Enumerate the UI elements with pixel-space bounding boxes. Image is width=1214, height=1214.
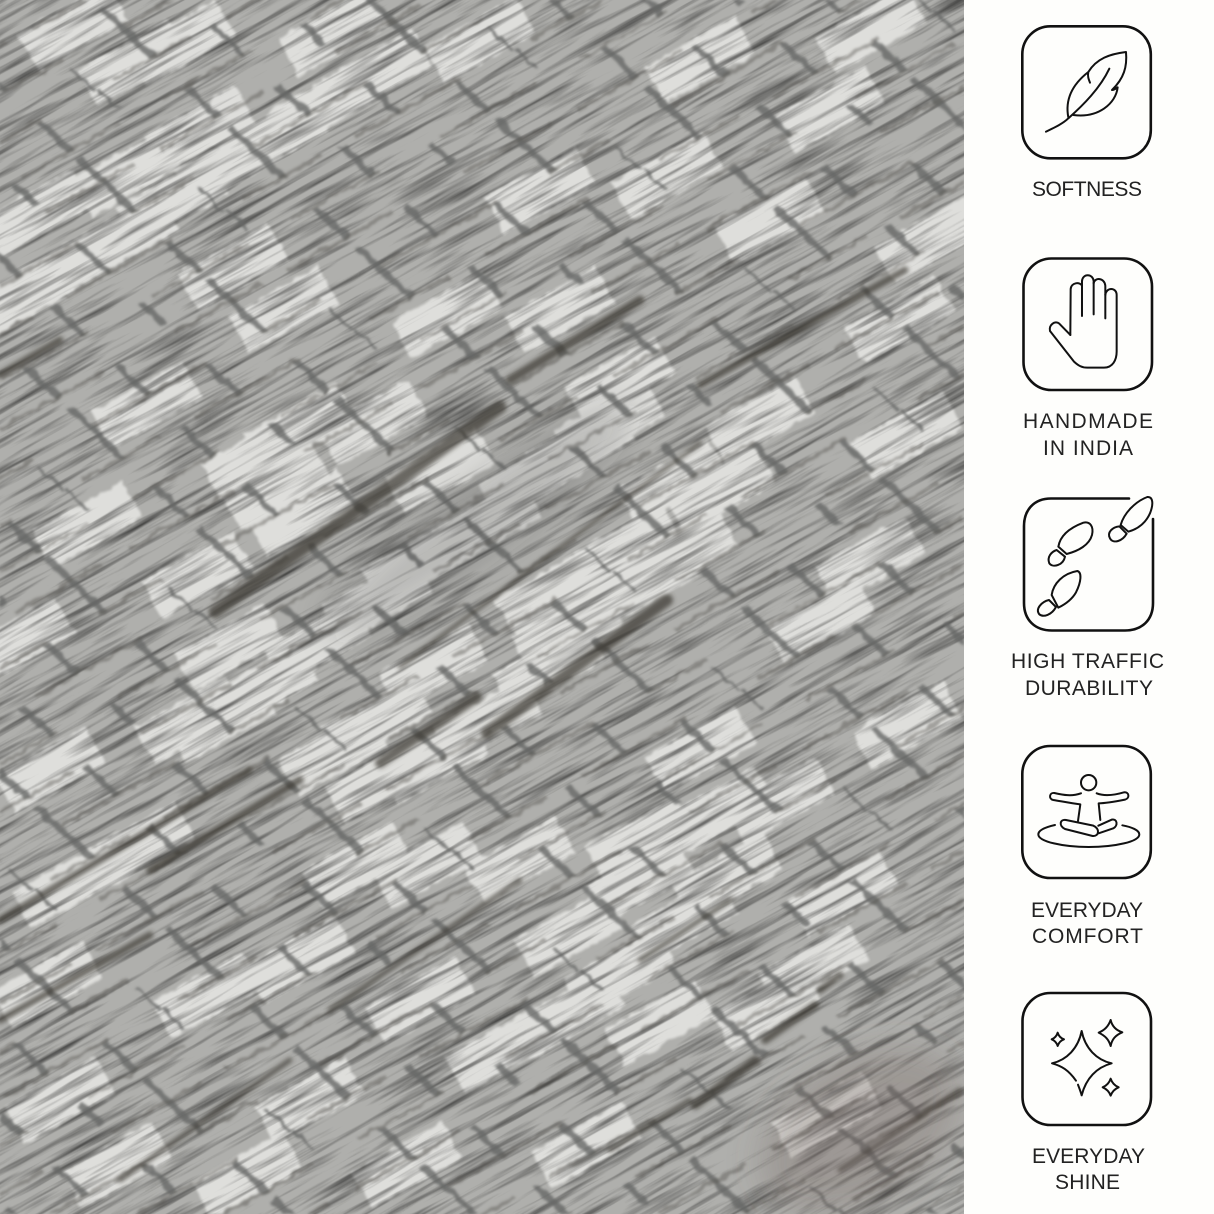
icon box: footprints	[1024, 497, 1153, 630]
feature: high traffic durability	[1011, 497, 1164, 700]
woven streaks	[0, 0, 964, 1214]
icon box: sparkles	[1022, 993, 1151, 1125]
label: high traffic durability: DURABILITY	[1025, 677, 1153, 700]
label: handmade in india	[1023, 410, 1153, 460]
label: everyday shine: SHINE	[1055, 1171, 1120, 1194]
icon box: feather	[1022, 26, 1151, 158]
label: everyday shine	[1032, 1145, 1145, 1194]
icon box: meditating figure	[1022, 746, 1151, 878]
label: everyday comfort: COMFORT	[1032, 925, 1143, 948]
label: handmade in india: HANDMADE	[1023, 410, 1153, 433]
label: handmade in india: IN INDIA	[1043, 437, 1133, 460]
label: everyday comfort: EVERYDAY	[1031, 899, 1143, 922]
label: high traffic durability: HIGH TRAFFIC	[1011, 650, 1164, 673]
label: high traffic durability	[1011, 650, 1164, 700]
feature: everyday comfort	[1022, 746, 1151, 948]
label: everyday shine: EVERYDAY	[1032, 1145, 1145, 1168]
dark bands	[0, 270, 960, 1180]
grid lines	[0, 0, 964, 1214]
feature: softness	[1022, 26, 1151, 201]
label: everyday comfort	[1031, 899, 1143, 948]
shade regions	[306, 381, 990, 1214]
feature: everyday shine	[1022, 993, 1151, 1194]
label: softness: SOFTNESS	[1032, 178, 1142, 201]
feature: handmade in india	[1023, 258, 1153, 460]
icon box: hand	[1024, 258, 1152, 390]
